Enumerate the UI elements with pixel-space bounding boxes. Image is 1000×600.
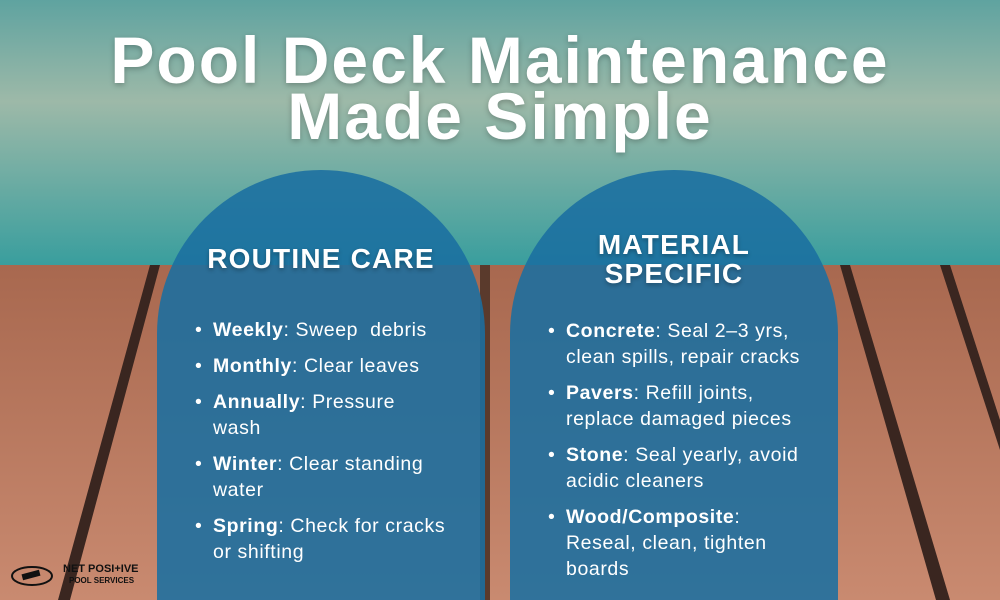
list: routine care: or shifting	[213, 541, 304, 563]
list: routine care: Annually: Pressure	[213, 391, 395, 413]
list: material specific: Concrete: Seal 2–3 yrs,	[566, 320, 789, 342]
list: material specific: acidic cleaners	[566, 470, 704, 492]
title: Made Simple	[287, 79, 713, 153]
list: routine care	[196, 319, 445, 563]
title	[110, 23, 890, 157]
logo	[11, 563, 138, 586]
title: Pool Deck Maintenance	[110, 23, 890, 97]
heading: routine care: ROUTINE CARE	[207, 243, 435, 274]
list: material specific: Stone: Seal yearly, avoid	[566, 444, 798, 466]
panel: routine care	[157, 170, 485, 600]
list: routine care: wash	[213, 417, 261, 439]
list: material specific: Pavers: Refill joints,	[566, 382, 754, 404]
heading: material specific: SPECIFIC	[605, 258, 743, 289]
list: material specific	[548, 320, 800, 580]
list: routine care: water	[213, 479, 264, 501]
list: routine care: Spring: Check for cracks	[213, 515, 445, 537]
list: routine care: Weekly: Sweep debris	[213, 319, 427, 341]
list: material specific: clean spills, repair cracks	[566, 346, 800, 368]
heading: material specific: MATERIAL	[598, 229, 750, 260]
logo: POOL SERVICES	[69, 576, 134, 585]
panel: material specific	[510, 170, 838, 600]
list: routine care: Winter: Clear standing	[213, 453, 423, 475]
list: material specific: replace damaged pieces	[566, 408, 792, 430]
heading: material specific	[598, 229, 750, 289]
list: material specific: Reseal, clean, tighten	[566, 532, 767, 554]
list: material specific: Wood/Composite:	[566, 506, 740, 528]
list: material specific: boards	[566, 558, 629, 580]
list: routine care: Monthly: Clear leaves	[213, 355, 420, 377]
logo: NET POSI+IVE	[63, 563, 138, 575]
